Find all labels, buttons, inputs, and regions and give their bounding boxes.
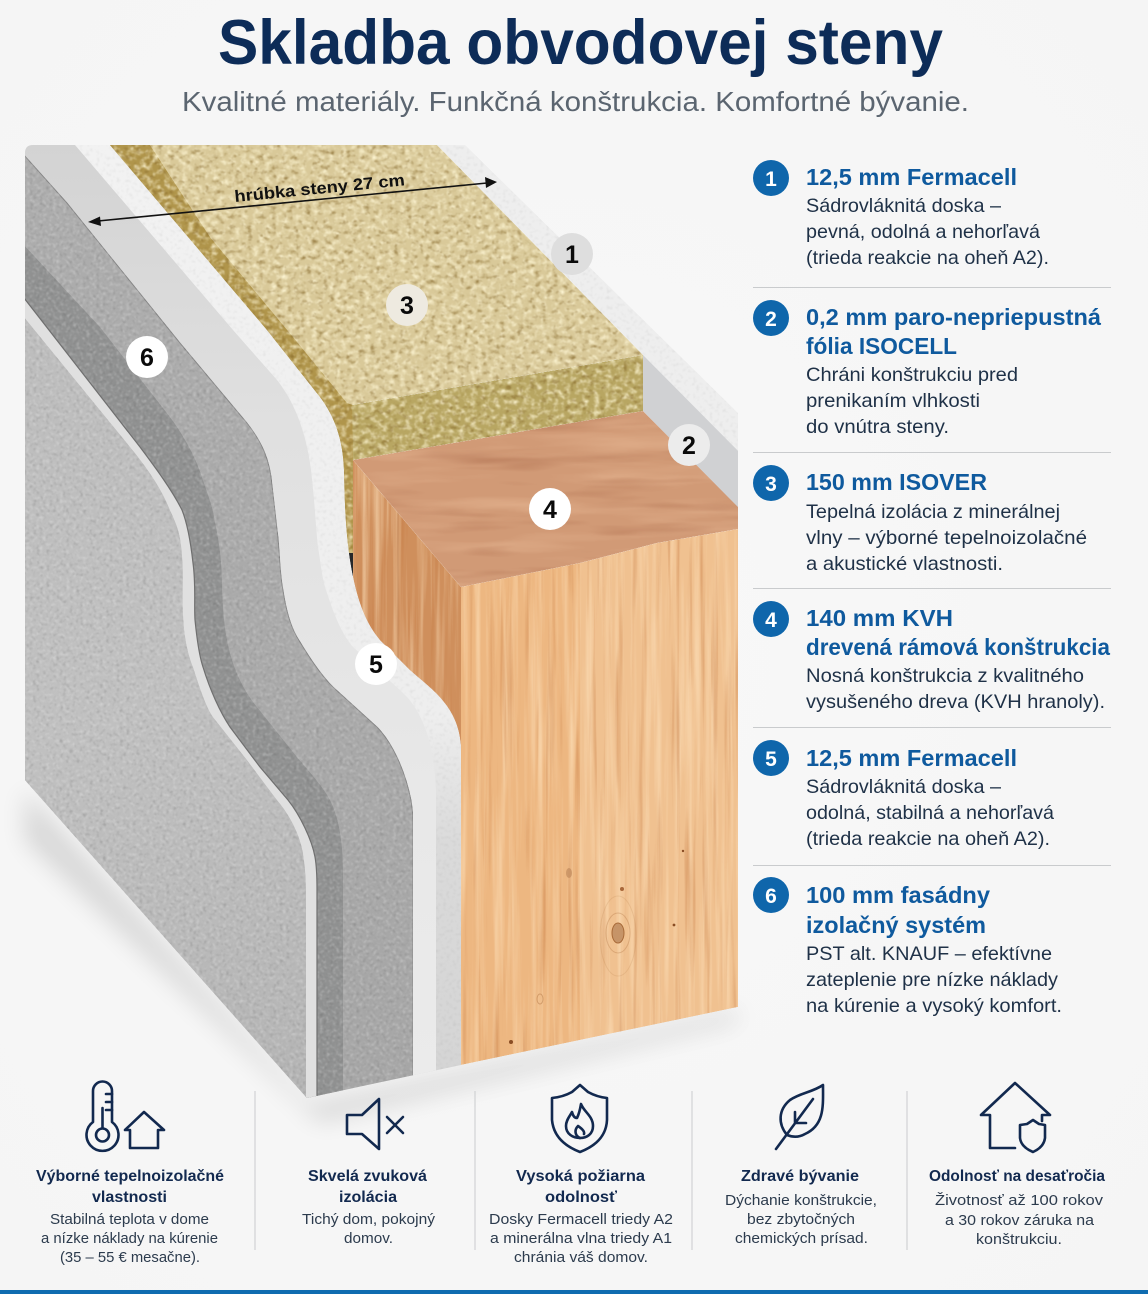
benefit: durability: Životnosť až 100 rokov xyxy=(935,1192,1104,1209)
layer 6 facade insulation xyxy=(0,145,413,1100)
legend item 3: Tepelná izolácia z minerálnej xyxy=(806,501,1060,523)
marker 1: 1 xyxy=(565,241,579,269)
facade insulation darker band xyxy=(25,246,343,1098)
legend item 4: Nosná konštrukcia z kvalitného xyxy=(806,665,1084,687)
front render face xyxy=(25,318,306,1096)
benefit: thermal insulation: a nízke náklady na kúrenie xyxy=(41,1230,218,1247)
benefit: fire resistance: odolnosť xyxy=(545,1189,617,1206)
legend item 5: Sádrovláknitá doska – xyxy=(806,776,1001,798)
legend item 6: na kúrenie a vysoký komfort. xyxy=(806,995,1062,1017)
legend item 4: drevená rámová konštrukcia xyxy=(806,634,1111,660)
benefit: healthy living: bez zbytočných xyxy=(747,1211,855,1228)
legend item 5: 5 xyxy=(765,748,777,771)
timber knots xyxy=(509,850,684,1044)
benefit: sound insulation: izolácia xyxy=(339,1189,397,1206)
legend item 6: 100 mm fasádny xyxy=(806,882,990,908)
legend item 3: vlny – výborné tepelnoizolačné xyxy=(806,527,1087,549)
marker 4: 4 xyxy=(543,496,557,524)
legend item 6: izolačný systém xyxy=(806,912,986,938)
legend item 2: fólia ISOCELL xyxy=(806,333,957,359)
benefit: fire resistance: Vysoká požiarna xyxy=(516,1168,645,1185)
ground shadow xyxy=(25,790,738,1122)
legend item 1: 1 xyxy=(765,168,777,191)
legend item 1: 12,5 mm Fermacell xyxy=(806,164,1017,190)
wall thickness dimension arrow xyxy=(88,171,497,226)
timber top xyxy=(353,411,738,587)
benefit: fire resistance: chránia váš domov. xyxy=(514,1249,648,1266)
benefit: fire resistance xyxy=(489,1085,673,1266)
legend item 2: prenikaním vlhkosti xyxy=(806,390,980,412)
benefit: thermal insulation: Stabilná teplota v dome xyxy=(50,1211,209,1228)
benefit: thermal insulation: vlastnosti xyxy=(92,1189,167,1206)
legend item 5: 12,5 mm Fermacell xyxy=(806,745,1017,771)
benefit: healthy living: Dýchanie konštrukcie, xyxy=(725,1192,877,1209)
legend item 6: zateplenie pre nízke náklady xyxy=(806,969,1058,991)
legend item 3: a akustické vlastnosti. xyxy=(806,553,1003,575)
benefit: sound insulation: domov. xyxy=(344,1230,393,1247)
legend item 4: vysušeného dreva (KVH hranoly). xyxy=(806,691,1105,713)
icon: shield with flame xyxy=(552,1085,607,1152)
benefit: thermal insulation: (35 – 55 € mesačne). xyxy=(60,1249,200,1266)
marker 1 xyxy=(551,233,593,275)
icon: leaf xyxy=(776,1085,823,1149)
marker 5 xyxy=(355,643,397,685)
benefit: healthy living: chemických prísad. xyxy=(735,1230,868,1247)
mineral wool dark side xyxy=(100,145,353,560)
legend item 2: 2 xyxy=(765,308,777,331)
benefit: durability: Odolnosť na desaťročia xyxy=(929,1168,1105,1185)
legend item 1 xyxy=(753,160,1049,269)
marker 3 xyxy=(386,284,428,326)
icon: thermometer and house xyxy=(86,1082,164,1151)
wall thickness dimension arrow: hrúbka steny 27 cm xyxy=(234,171,406,206)
legend item 6 xyxy=(753,877,1062,1017)
benefit: durability: konštrukciu. xyxy=(976,1231,1062,1248)
layer 1 outer board, right side xyxy=(437,145,745,460)
benefit: sound insulation: Skvelá zvuková xyxy=(308,1168,427,1185)
layer 5 inner board outer band xyxy=(80,145,461,1071)
marker 2 xyxy=(668,424,710,466)
legend item 3: 150 mm ISOVER xyxy=(806,469,987,495)
legend item 6: 6 xyxy=(765,885,777,908)
legend item 2: Chráni konštrukciu pred xyxy=(806,364,1018,386)
icon: muted speaker xyxy=(347,1099,403,1149)
benefit: thermal insulation: Výborné tepelnoizolačné xyxy=(36,1168,224,1185)
legend item 5: odolná, stabilná a nehorľavá xyxy=(806,802,1054,824)
icon: house with shield xyxy=(981,1083,1050,1152)
legend item 4: 4 xyxy=(765,609,777,632)
legend item 3: 3 xyxy=(765,473,777,496)
marker 6: 6 xyxy=(140,344,154,372)
benefit: durability xyxy=(929,1083,1105,1248)
marker 6 xyxy=(126,336,168,378)
marker 5: 5 xyxy=(369,651,383,679)
legend item 2 xyxy=(753,300,1102,438)
legend item 2: 0,2 mm paro-nepriepustná xyxy=(806,304,1102,330)
layer 5 inner board inner band xyxy=(0,145,436,1100)
marker 3: 3 xyxy=(400,292,414,320)
legend item 1: pevná, odolná a nehorľavá xyxy=(806,221,1040,243)
legend item 1: (trieda reakcie na oheň A2). xyxy=(806,247,1049,269)
legend item 4: 140 mm KVH xyxy=(806,605,953,631)
benefit: healthy living xyxy=(725,1085,877,1247)
marker 4 xyxy=(529,488,571,530)
benefit: fire resistance: Dosky Fermacell triedy A2 xyxy=(489,1211,673,1228)
layer 2 vapour foil xyxy=(643,355,738,507)
render strip xyxy=(0,280,317,1100)
legend item 5 xyxy=(753,740,1054,850)
mineral wool front xyxy=(352,355,643,460)
wall cross-section illustration xyxy=(0,145,745,1122)
legend item 2: do vnútra steny. xyxy=(806,416,949,438)
legend item 6: PST alt. KNAUF – efektívne xyxy=(806,943,1052,965)
subtitle: Kvalitné materiály. Funkčná konštrukcia. Komfortné bývanie. xyxy=(182,86,969,117)
benefit: sound insulation: Tichý dom, pokojný xyxy=(302,1211,436,1228)
benefit: healthy living: Zdravé bývanie xyxy=(741,1168,859,1185)
legend item 1: Sádrovláknitá doska – xyxy=(806,195,1001,217)
layer 3 mineral wool top xyxy=(150,145,643,405)
benefit: thermal insulation xyxy=(36,1082,224,1266)
benefit: durability: a 30 rokov záruka na xyxy=(945,1212,1095,1229)
benefit: fire resistance: a minerálna vlna triedy A1 xyxy=(490,1230,672,1247)
timber front xyxy=(461,563,580,1065)
legend item 5: (trieda reakcie na oheň A2). xyxy=(806,828,1050,850)
legend item 4 xyxy=(753,601,1111,713)
title: Skladba obvodovej steny xyxy=(218,8,943,78)
marker 2: 2 xyxy=(682,432,696,460)
layer 4 timber left side xyxy=(353,460,461,745)
foil gap xyxy=(349,553,353,576)
benefit: sound insulation xyxy=(302,1099,436,1247)
legend item 3 xyxy=(753,465,1087,575)
